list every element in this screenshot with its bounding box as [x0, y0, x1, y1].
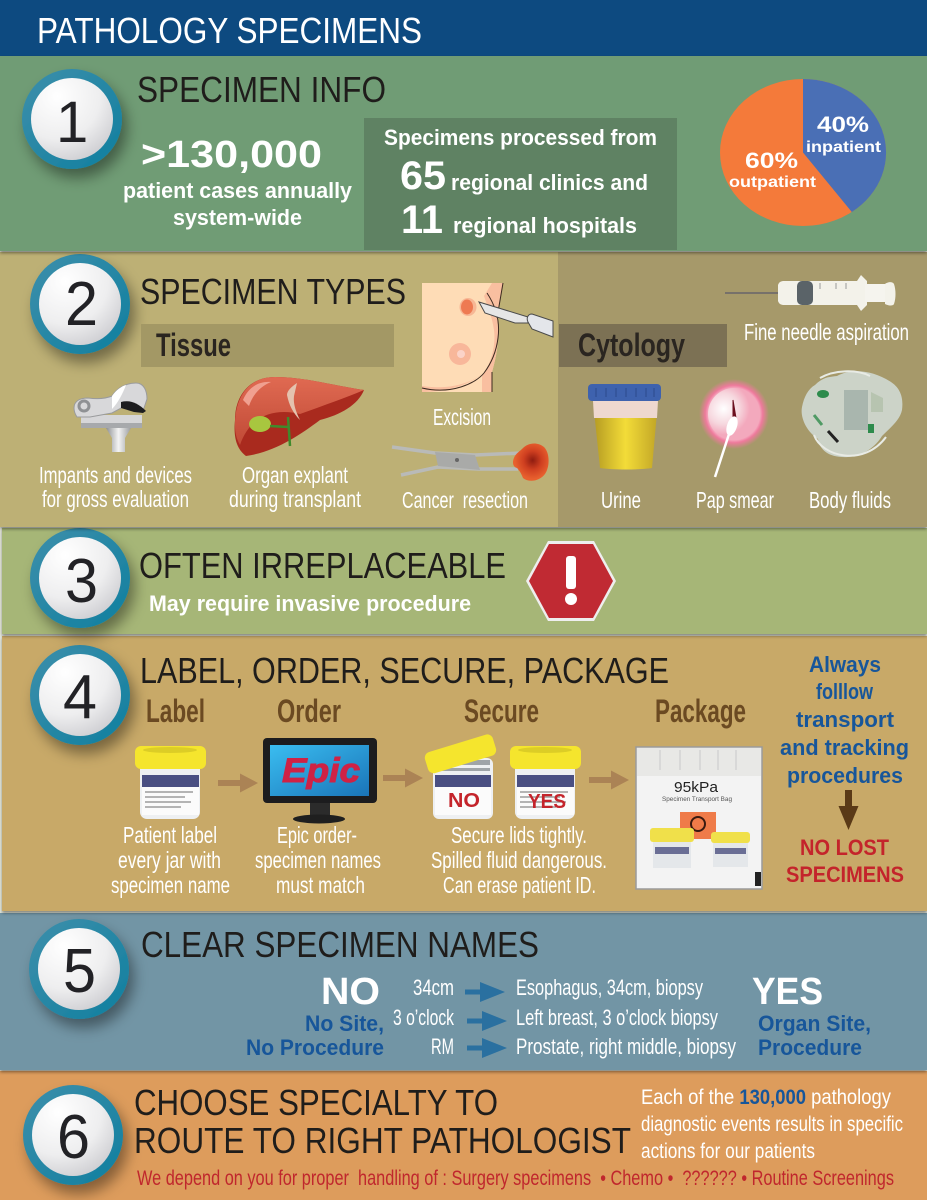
- sites box: [364, 118, 677, 250]
- cytology bar: Cytology: [578, 327, 685, 363]
- caption: implants: [39, 462, 192, 512]
- bad names: RM: [431, 1034, 454, 1059]
- good names: Prostate, right middle, biopsy: [516, 1034, 736, 1059]
- NO column: [246, 971, 384, 1060]
- YES column: YES: [752, 971, 823, 1013]
- diagnostic events note: [641, 1086, 903, 1163]
- step captions: Patient label: [123, 822, 217, 848]
- panel 3: often irreplaceable: [2, 528, 927, 634]
- number badge 3: 3: [65, 547, 98, 616]
- sites box: 65: [400, 154, 446, 198]
- heading 2: SPECIMEN TYPES: [140, 271, 406, 312]
- no lost specimens: NO LOST: [800, 835, 890, 860]
- pie chart: inpatient: [806, 139, 882, 156]
- good names: Esophagus, 34cm, biopsy: [516, 975, 703, 1000]
- heading 1: SPECIMEN INFO: [137, 69, 386, 110]
- cytology bar: [559, 324, 727, 367]
- transport note: [780, 652, 909, 788]
- diagnostic events note: actions for our patients: [641, 1140, 815, 1163]
- step captions: Secure lids tightly.: [451, 822, 587, 848]
- caption: cancer resection: Cancer resection: [402, 487, 528, 513]
- transport note: procedures: [787, 763, 903, 788]
- pie chart: [720, 79, 886, 226]
- bad names: 3 o’clock: [393, 1005, 455, 1030]
- icon: transport bag: 95kPa: [674, 779, 719, 796]
- NO column: NO: [321, 971, 380, 1013]
- sites box: Specimens processed from: [384, 125, 657, 150]
- caption: urine: Urine: [601, 487, 641, 513]
- NO column: No Site,: [305, 1011, 384, 1036]
- YES column: Procedure: [758, 1035, 862, 1060]
- sites box: 11: [401, 198, 443, 242]
- number badge 1: [22, 69, 122, 169]
- pie chart: 60%: [745, 148, 798, 173]
- icon: jar with tight lid: YES: [528, 791, 566, 813]
- step titles: Order: [277, 693, 341, 729]
- icon: liver: [235, 377, 364, 456]
- title: PATHOLOGY SPECIMENS: [37, 10, 422, 51]
- pie chart: outpatient: [729, 174, 817, 191]
- diagnostic events note: Each of the 130,000 pathology: [641, 1086, 891, 1109]
- arrow: [383, 768, 423, 788]
- number badge 6: 6: [57, 1103, 90, 1172]
- bad names: 34cm: [413, 975, 454, 1000]
- transport note: and tracking: [780, 735, 909, 760]
- heading 6: ROUTE TO RIGHT PATHOLOGIST: [134, 1120, 631, 1161]
- number badge 2: [30, 254, 130, 354]
- heading 6: [134, 1082, 631, 1161]
- pie chart: 40%: [817, 112, 869, 137]
- annual case count: patient cases annually: [123, 178, 353, 203]
- step captions: Can erase patient ID.: [443, 872, 596, 898]
- heading 5: CLEAR SPECIMEN NAMES: [141, 924, 539, 965]
- icon: urine cup: [588, 384, 661, 470]
- icon: jar with loose lid: [423, 733, 498, 819]
- cytology background: [558, 252, 927, 527]
- no lost specimens: SPECIMENS: [786, 862, 904, 887]
- icon: epic monitor: Epic: [282, 752, 360, 790]
- number badge 6: [23, 1085, 123, 1185]
- tissue bar: [141, 324, 394, 367]
- number badge 2: 2: [65, 270, 98, 339]
- heading 3: OFTEN IRREPLACEABLE: [139, 545, 506, 586]
- number badge 4: [30, 645, 130, 745]
- step captions: [111, 822, 607, 898]
- number badge 5: [29, 919, 129, 1019]
- tissue bar: Tissue: [156, 327, 231, 363]
- panel 4: label order secure package: [2, 636, 927, 911]
- no lost specimens: [786, 835, 904, 887]
- number badge 1: 1: [56, 90, 88, 155]
- caption: excision: Excision: [433, 404, 491, 430]
- panel: header: [0, 0, 927, 56]
- caption: pap smear: Pap smear: [696, 487, 774, 513]
- transport note: Always: [809, 652, 881, 677]
- arrow: [589, 770, 629, 790]
- panel 5: clear specimen names: [0, 913, 927, 1070]
- number badge 4: 4: [63, 663, 97, 732]
- NO column: No Procedure: [246, 1035, 384, 1060]
- bad names: [393, 975, 455, 1059]
- icon: excision: [422, 283, 553, 392]
- icon: jar with loose lid: NO: [448, 790, 480, 812]
- icon: transport bag: Specimen Transport Bag: [662, 796, 732, 803]
- caption: organ explant: [229, 462, 361, 512]
- panel 6: choose specialty: [0, 1071, 927, 1200]
- panel 2: specimen types: [0, 252, 927, 527]
- step captions: must match: [276, 872, 365, 898]
- step titles: [146, 693, 746, 729]
- transport note: transport: [796, 707, 895, 732]
- icon: pap smear: [699, 379, 769, 477]
- heading 4: LABEL, ORDER, SECURE, PACKAGE: [140, 650, 669, 691]
- step captions: Spilled fluid dangerous.: [431, 847, 607, 873]
- subheading 3: May require invasive procedure: [149, 591, 471, 616]
- arrows: [465, 982, 507, 1058]
- annual case count: [123, 134, 353, 230]
- icon: labeled jar: [135, 746, 206, 819]
- caption: body fluids: Body fluids: [809, 487, 891, 513]
- transport note: folllow: [816, 679, 874, 704]
- caption: organ explant: Organ explant: [242, 462, 348, 488]
- panel 1: specimen info: [0, 56, 927, 251]
- icon: knee implant: [74, 383, 147, 452]
- good names: [516, 975, 736, 1059]
- sites box: regional hospitals: [453, 213, 637, 238]
- icon: drainage bag: [802, 371, 902, 457]
- sites box: regional clinics and: [451, 170, 648, 195]
- heading 6: CHOOSE SPECIALTY TO: [134, 1082, 498, 1123]
- icon: jar with tight lid: [510, 746, 581, 819]
- step titles: Label: [146, 693, 205, 729]
- step captions: Epic order-: [277, 822, 357, 848]
- number badge 3: [30, 528, 130, 628]
- caption: implants: for gross evaluation: [42, 486, 189, 512]
- arrow: down: [838, 790, 858, 830]
- icon: warning hexagon: [526, 541, 616, 621]
- annual case count: >130,000: [141, 134, 322, 176]
- icon: epic monitor: [263, 738, 377, 824]
- step captions: specimen names: [255, 847, 381, 873]
- number badge 5: 5: [63, 937, 96, 1006]
- icon: clamp with tumor: [392, 443, 549, 481]
- caption: implants: Impants and devices: [39, 462, 192, 488]
- good names: Left breast, 3 o’clock biopsy: [516, 1005, 718, 1030]
- YES column: Organ Site,: [758, 1011, 871, 1036]
- icon: syringe: [725, 275, 896, 311]
- step captions: every jar with: [118, 847, 221, 873]
- step titles: Package: [655, 693, 746, 729]
- YES column: [752, 971, 871, 1060]
- annual case count: system-wide: [173, 205, 302, 230]
- icon: transport bag: [636, 747, 762, 889]
- arrow: [218, 774, 258, 792]
- caption: organ explant: during transplant: [229, 486, 361, 512]
- step captions: specimen name: [111, 872, 230, 898]
- step titles: Secure: [464, 693, 539, 729]
